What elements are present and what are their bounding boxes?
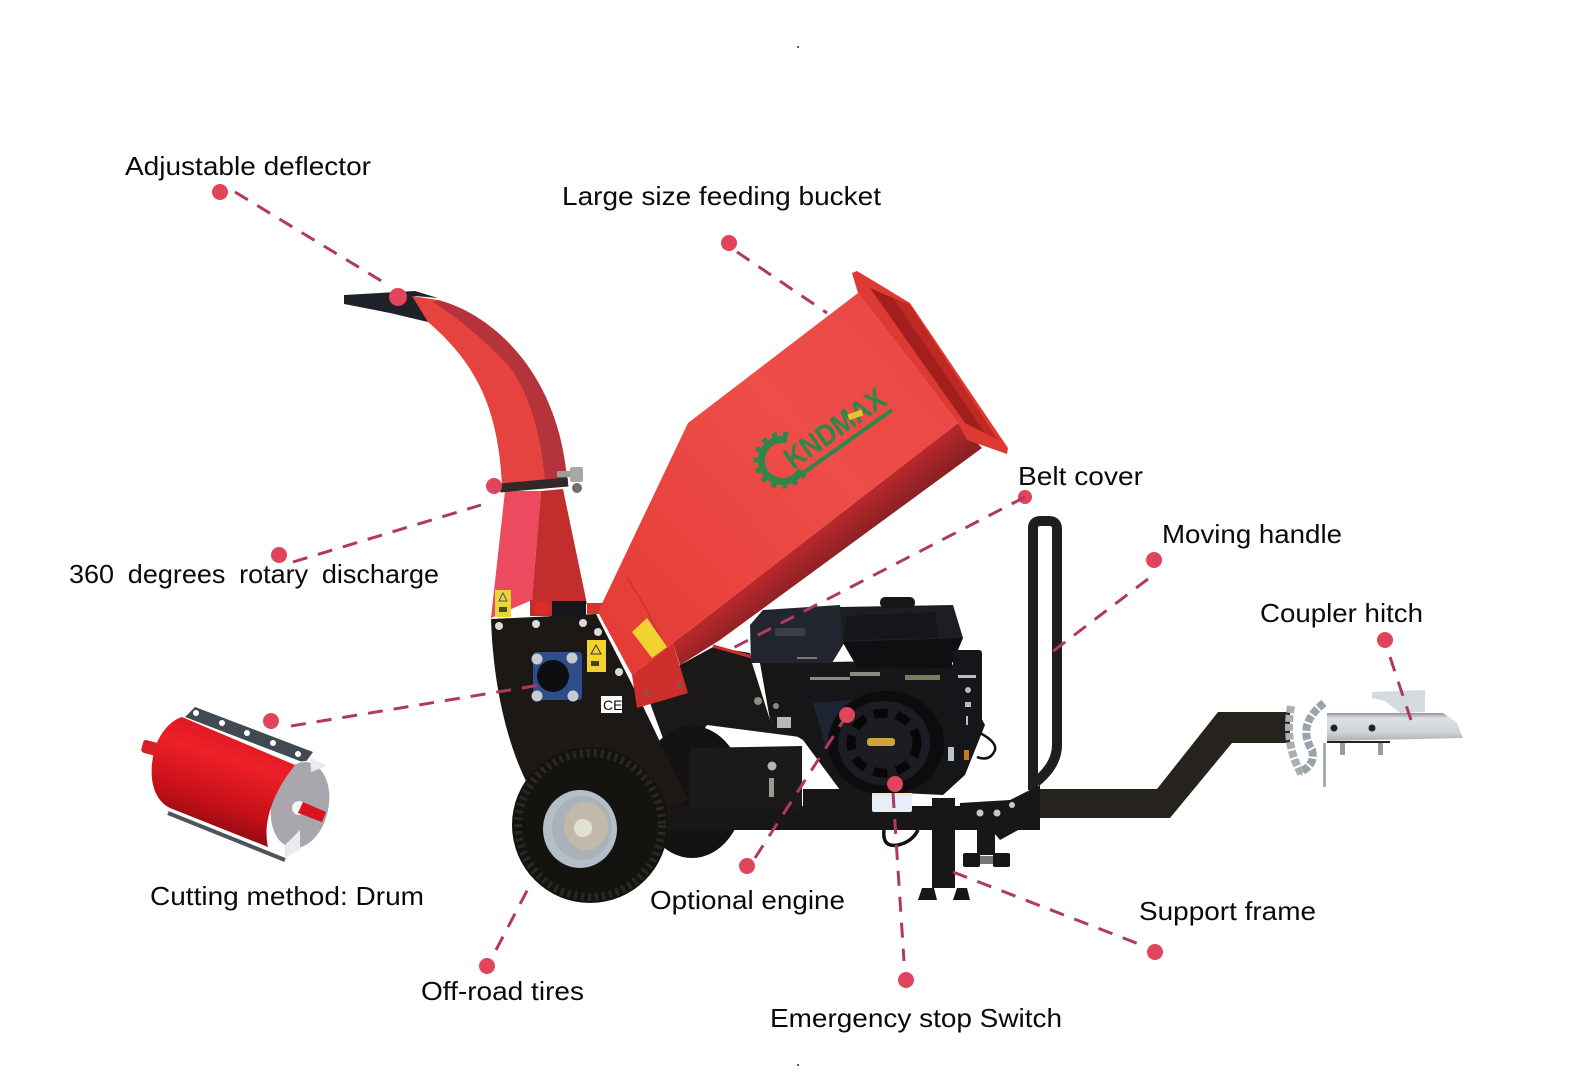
callout: Coupler hitch xyxy=(1260,598,1423,720)
air filter cover xyxy=(750,605,846,663)
callout: Cutting method: Drum: Cutting method: Drum xyxy=(150,881,424,911)
logo: Kndmax xyxy=(756,382,892,486)
emergency stop box xyxy=(872,793,912,812)
fuel tank xyxy=(840,605,963,668)
feeding bucket face xyxy=(598,293,958,675)
upper blade xyxy=(185,707,313,763)
callout: Off-road tires: Off-road tires xyxy=(421,976,584,1006)
callout: 360 degrees rotary discharge: 360 degrees rotary discharge xyxy=(69,559,439,589)
callout: Off-road tires xyxy=(421,885,584,1006)
drum rotor illustration xyxy=(141,707,338,860)
bearing housing xyxy=(532,652,582,702)
logo: Kndmax: KNDMAX xyxy=(778,382,892,476)
warning sticker: neck xyxy=(495,590,511,617)
callout: Optional engine xyxy=(650,707,855,915)
side plate xyxy=(491,614,688,812)
engine mount xyxy=(650,647,800,800)
callout: Belt cover: Belt cover xyxy=(1018,461,1143,491)
chute collar clamp xyxy=(500,467,583,493)
control panel xyxy=(953,650,982,730)
callout: Emergency stop Switch: Emergency stop Switch xyxy=(770,1003,1062,1033)
callout: Moving handle: Moving handle xyxy=(1162,519,1342,549)
end disc xyxy=(262,756,338,854)
callout: Coupler hitch: Coupler hitch xyxy=(1260,598,1423,628)
right shaft xyxy=(292,801,326,822)
side fittings xyxy=(948,747,954,761)
callout: Cutting method: Drum xyxy=(150,685,540,911)
callout: Adjustable deflector xyxy=(125,151,407,306)
callout: Support frame: Support frame xyxy=(1139,896,1316,926)
tool box xyxy=(690,746,802,810)
bucket mouth xyxy=(852,271,1008,454)
CE mark: CE xyxy=(603,697,622,713)
bucket lower flange xyxy=(632,643,688,708)
callout: Support frame xyxy=(953,872,1316,960)
moving handle xyxy=(1033,521,1057,790)
warning sticker: bucket xyxy=(632,618,667,658)
callout: 360 degrees rotary discharge xyxy=(69,478,502,589)
coupler body xyxy=(1327,713,1463,741)
rear wheel xyxy=(640,726,744,858)
callout: Optional engine: Optional engine xyxy=(650,885,845,915)
left shaft xyxy=(141,739,165,758)
fuel cap xyxy=(880,597,915,608)
tow coupler xyxy=(1289,690,1463,787)
carburettor details xyxy=(754,672,940,728)
crease lines on bucket xyxy=(627,577,665,647)
adjustable deflector plate xyxy=(344,291,438,322)
engine block xyxy=(760,660,985,795)
callout: Belt cover xyxy=(733,461,1143,648)
callout: Moving handle xyxy=(1052,519,1342,652)
drum body xyxy=(152,717,295,847)
front wheel xyxy=(512,747,668,903)
engine xyxy=(750,597,985,795)
plate bolts xyxy=(495,619,623,676)
discharge neck xyxy=(491,489,587,618)
safety chain xyxy=(1289,706,1302,775)
disc notches xyxy=(285,757,327,858)
warning sticker: plate xyxy=(587,640,606,672)
frame beam xyxy=(665,789,1040,830)
recoil starter cover xyxy=(813,691,944,795)
bucket underside xyxy=(673,423,982,665)
lower blade xyxy=(168,813,285,860)
callout: Adjustable deflector: Adjustable deflector xyxy=(125,151,371,181)
callout: Large size feeding bucket: Large size feeding bucket xyxy=(562,181,882,211)
hitch bracket xyxy=(960,785,1040,840)
coupler latch xyxy=(1372,690,1425,713)
discharge chute xyxy=(412,296,567,485)
cables xyxy=(884,830,918,845)
callout: Emergency stop Switch xyxy=(770,776,1062,1033)
tiny marks xyxy=(797,46,799,1066)
callout: Large size feeding bucket xyxy=(562,181,882,313)
jack stand xyxy=(918,798,1010,900)
drawbar xyxy=(1035,712,1290,818)
machine: wood chipper xyxy=(344,271,1463,903)
